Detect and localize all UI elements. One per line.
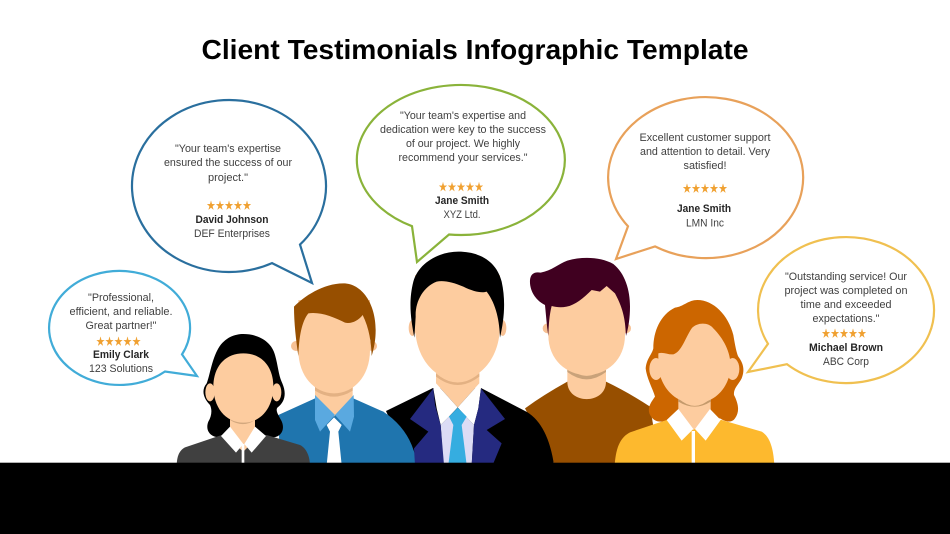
XYZ quote [380,110,546,164]
center man face [415,275,500,380]
center man collar [433,383,481,425]
left woman placket [242,444,244,467]
Emily quote: "Professional, [88,292,154,304]
XYZ name: Jane Smith [435,195,489,207]
person: center man front layer [409,252,506,465]
center man lapels [410,388,505,465]
right woman neck shadow [678,398,711,407]
David quote: project." [208,172,248,184]
David quote: "Your team's expertise [175,143,281,155]
Emily quote: efficient, and reliable. [70,306,172,318]
right woman blouse [615,420,774,465]
David name: David Johnson [196,214,269,226]
XYZ bubble outline [357,85,565,262]
Michael bubble outline [748,237,934,383]
Emily quote [70,292,172,332]
person: right woman [615,300,774,465]
right woman hair [646,300,743,422]
center man ears [409,320,506,336]
XYZ company: XYZ Ltd. [444,209,480,221]
left woman neck [230,413,255,452]
bubble: Jane Smith XYZ [357,85,565,262]
David quote [164,143,292,184]
Emily name: Emily Clark [93,349,150,361]
Michael quote: "Outstanding service! Our [785,271,907,283]
bubble: Michael Brown [748,237,934,383]
XYZ quote: dedication were key to the success [380,124,546,136]
Michael quote: time and exceeded [800,299,892,311]
David bubble outline [132,100,326,283]
right woman placket [692,431,695,465]
LMN stars: ★★★★★ [682,182,728,196]
center man tie [448,408,467,465]
center man hair [410,252,504,338]
Michael name: Michael Brown [809,342,883,354]
left woman neck shadow [230,415,255,424]
XYZ quote: "Your team's expertise and [400,110,526,122]
right woman face [658,324,731,403]
left woman face [213,353,273,423]
title: Client Testimonials Infographic Template [202,34,748,65]
Emily bubble outline [49,271,197,385]
LMN quote: satisfied! [684,160,726,172]
left woman collar [221,427,266,453]
LMN name: Jane Smith [677,203,731,215]
David stars: ★★★★★ [206,198,252,212]
Emily company: 123 Solutions [89,363,153,375]
right woman ears [649,358,739,380]
center man shirt [441,417,474,465]
LMN quote: Excellent customer support [640,132,770,144]
black footer band [0,463,950,534]
person: left woman [177,334,310,467]
right woman neck [678,392,711,430]
center man neck [436,362,479,407]
LMN bubble outline [608,97,803,259]
Emily stars: ★★★★★ [96,334,141,348]
bubble: Emily Clark [49,271,197,385]
Emily quote: Great partner!" [86,320,157,332]
XYZ stars: ★★★★★ [438,180,484,194]
left woman ears [205,383,281,401]
David quote: ensured the success of our [164,157,292,169]
left woman blouse [177,435,310,467]
David company: DEF Enterprises [194,228,270,240]
person: brown shirt man [525,258,660,465]
Michael company: ABC Corp [823,356,869,368]
left woman hair [203,334,285,437]
person: center man suit back layer [386,388,554,465]
Michael stars: ★★★★★ [822,326,866,340]
XYZ quote: recommend your services." [398,152,528,164]
Michael quote [784,271,908,325]
Michael quote: expectations." [812,313,880,325]
center man neck shadow [436,373,479,385]
LMN company: LMN Inc [686,218,724,230]
XYZ quote: of our project. We highly [406,138,520,150]
LMN quote [640,132,770,172]
Michael quote: project was completed on [784,285,908,297]
person: blue shirt man [278,283,419,465]
bubble: David Johnson [132,100,326,283]
bubble: Jane Smith LMN [608,97,803,259]
right woman collar [667,409,721,441]
LMN quote: and attention to detail. Very [640,146,770,158]
